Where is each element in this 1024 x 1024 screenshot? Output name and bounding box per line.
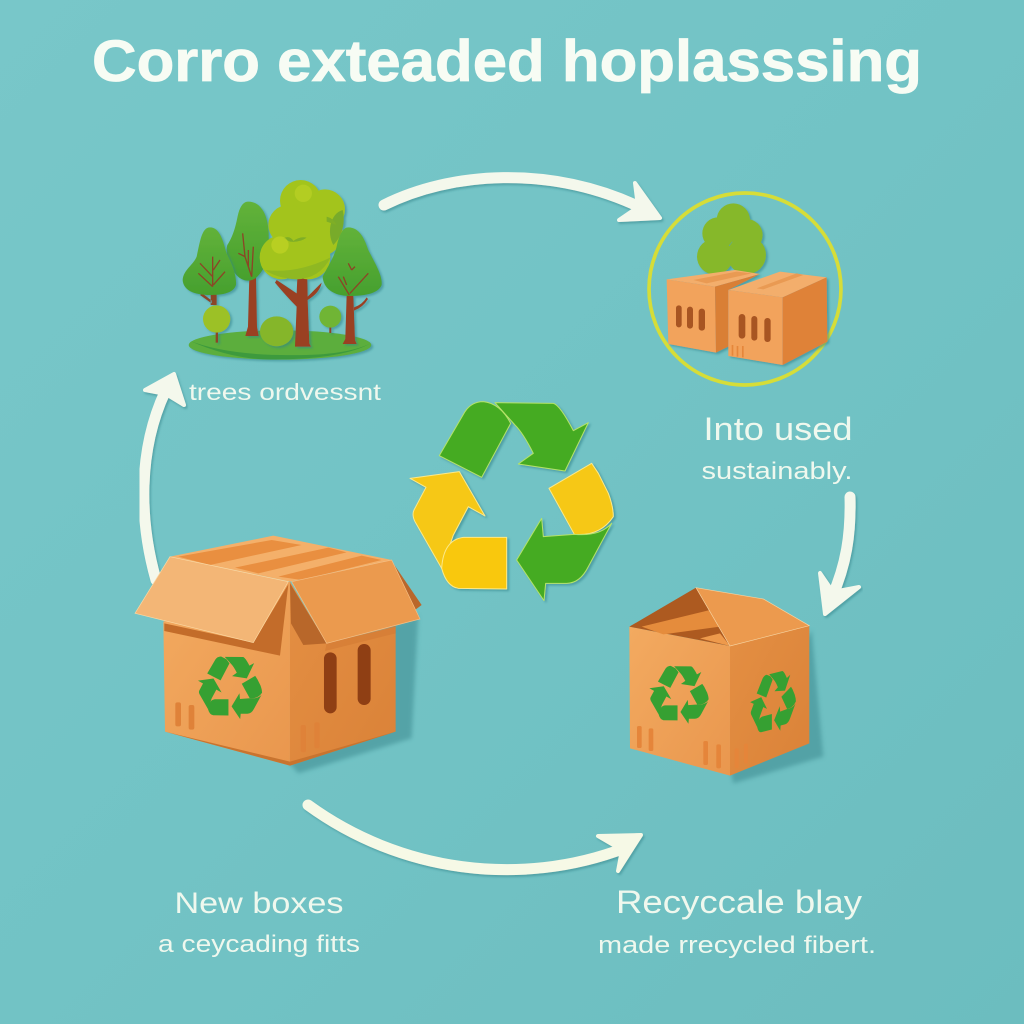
icon: small recycling mark on new box (198, 656, 262, 719)
inner flap shadows (164, 583, 396, 656)
right face (290, 582, 396, 766)
left face (629, 627, 730, 776)
title: Corro exteaded hoplasssing (92, 29, 922, 94)
arrow: recyclable box to new box (308, 805, 641, 871)
tree: right (323, 227, 382, 344)
right flap (292, 560, 420, 643)
icon: recycling mark on front face (649, 666, 709, 724)
left face (163, 582, 290, 766)
tree: big centre (260, 180, 345, 347)
label: into used: sustainably. (702, 458, 852, 485)
label: into used: Into used (704, 411, 852, 447)
box shadow (285, 615, 418, 773)
box shadow (730, 630, 823, 783)
arrow: used boxes to recyclable box (820, 497, 859, 614)
segment: right yellow (549, 463, 613, 535)
icon: recyclable closed box (629, 588, 823, 783)
label: into used (702, 411, 852, 485)
bushes (203, 305, 341, 346)
bottom edge (165, 732, 396, 766)
label: recyclable: Recyccale blay (616, 884, 862, 920)
top inner flaps with stripes (170, 536, 392, 582)
segment: top green (439, 402, 588, 477)
icon: recycling mark on side face (750, 667, 796, 739)
label: new boxes (158, 887, 360, 958)
segment: bottom green (517, 518, 612, 601)
label: recyclable (598, 884, 876, 959)
arrow: new box to trees (144, 374, 184, 580)
tick marks (637, 726, 748, 768)
grass island (189, 330, 371, 360)
left flap (135, 557, 288, 643)
label: new boxes: a ceycading fitts (158, 931, 360, 958)
label: recyclable: made rrecycled fibert. (598, 932, 876, 959)
tick marks (175, 702, 320, 752)
arrow: trees to used boxes (384, 178, 660, 220)
box opening (629, 588, 730, 646)
icon: used boxes with tree in yellow ring (649, 193, 841, 385)
right face (730, 626, 809, 776)
bush (697, 203, 766, 275)
label: new boxes: New boxes (174, 887, 344, 920)
back flap (392, 561, 422, 610)
icon: trees on grass island (183, 180, 382, 360)
tree: left (183, 227, 236, 305)
top flap (696, 588, 809, 646)
icon: new open box (135, 536, 422, 773)
slots (324, 644, 371, 713)
box: first (667, 270, 760, 353)
tree: second (227, 202, 269, 336)
box: second (728, 272, 827, 365)
icon: central recycling symbol (410, 402, 613, 601)
yellow ring (649, 193, 841, 385)
label: trees: trees ordvessnt (189, 379, 382, 405)
segment: left yellow (410, 472, 507, 589)
